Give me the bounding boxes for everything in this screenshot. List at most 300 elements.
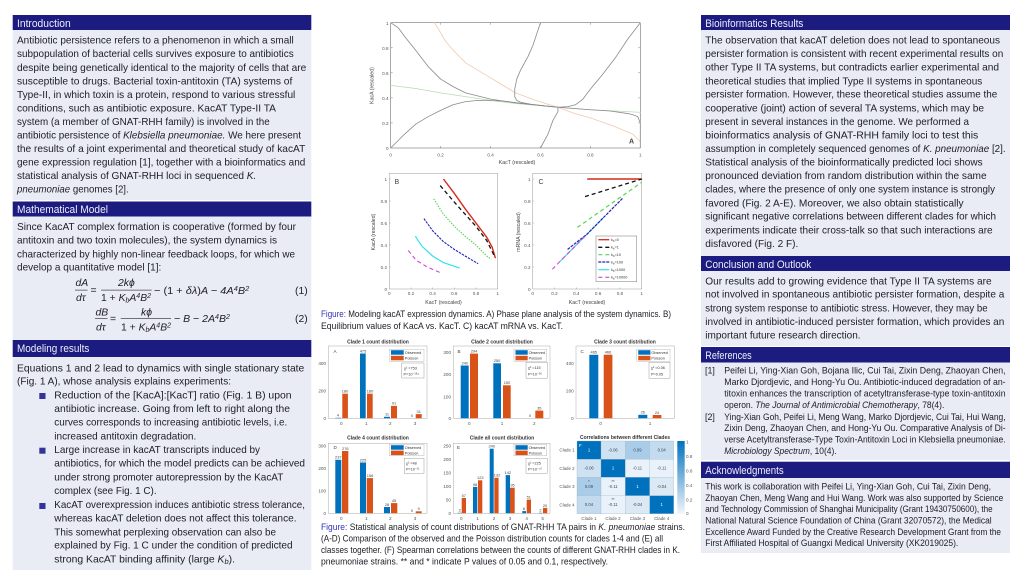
chart: Fig 1C mRNA vs KacT: 0.2 — [551, 291, 558, 296]
panel: mathematical model — [13, 202, 311, 340]
chart: Clade 3 count distribution: C — [580, 349, 584, 354]
chart: Clade 4 count distribution: 3 — [414, 516, 417, 521]
legend: k_b values: =10000 — [615, 276, 627, 280]
bullet item 2: Large increase in kacAT transcripts induced by — [54, 445, 261, 456]
chart: Clade 1 count distribution: A — [334, 349, 338, 354]
text block: bioinformatics — [705, 35, 1006, 250]
chart: Clade all count distribution: 5 — [541, 516, 544, 521]
equation 2: B — [219, 314, 226, 325]
text block: bioinformatics: disfavored (Fig. 2 F). — [705, 239, 798, 250]
legend: observed / poisson: Poisson — [405, 357, 418, 361]
legend: k_b values — [596, 236, 637, 282]
equation 1: dτ — [76, 293, 87, 304]
reference 2: [2] — [705, 412, 715, 422]
equation 2: 4 — [156, 323, 160, 330]
text block: acknowledgments: First Affiliated Hospital of Guangxi Medical University (XK2019025). — [705, 538, 958, 548]
legend: observed / poisson: Poisson — [651, 357, 665, 361]
chart: Clade all count distribution: 200 — [443, 457, 451, 462]
bullet item 1: increased antitoxin degradation. — [54, 431, 196, 442]
equation 2: b — [145, 327, 149, 334]
chart: correlation heatmap: -0.04 — [657, 484, 667, 489]
chart: Clade all count distribution: 1 — [476, 516, 479, 521]
chart: Fig 1A phase plane: 0.2 — [437, 152, 444, 158]
chart: Clade 4 count distribution: 200 — [318, 466, 326, 471]
equation 2: kϕ — [141, 308, 152, 319]
chart: Clade all count distribution: 2 — [539, 508, 542, 513]
chart: Clade 2 count distribution: 35 — [537, 405, 541, 410]
legend: k_b values: b — [613, 254, 615, 258]
bullet item 1: antibiotic increase. Going from left to right along the — [54, 404, 290, 415]
legend: observed / poisson — [514, 349, 547, 361]
chart: Clade all count distribution: 8 — [523, 506, 525, 511]
bullet item 1: Reduction of the [KacA]:[KacT] ratio (Fig. 1 B) upon — [54, 390, 292, 401]
chart: Fig 1C mRNA vs KacT: 0.4 — [524, 243, 531, 248]
text block: introduction: system (a member of GNAT-RHH family) is involved in the — [17, 117, 270, 128]
chart: correlation heatmap: Clade 3 — [559, 484, 575, 489]
chart: correlation heatmap: 1 — [636, 484, 639, 489]
reference 2: Microbiology Spectrum, 10(4). — [724, 446, 837, 456]
chart: correlation heatmap: Clade 2 — [605, 516, 621, 521]
legend: observed / poisson: Poisson — [405, 451, 418, 455]
legend: k_b values: =1000 — [615, 268, 625, 272]
chart: Clade all count distribution: Clade all count distribution — [470, 436, 534, 442]
heading: conclusion and outlook: Conclusion and Outlook — [705, 259, 812, 271]
chart: Clade all count distribution: 98 — [473, 482, 477, 487]
text block: modeling intro: Equations 1 and 2 lead to dynamics with single stationary state — [17, 363, 305, 374]
chart: Clade all count distribution: 4 — [525, 516, 528, 521]
chart: Fig 1A phase plane: KacT (rescaled) — [499, 160, 536, 166]
legend: k_b values: b — [613, 261, 615, 265]
legend: k_b values: k — [611, 268, 613, 272]
chart: Fig 1B KacA vs KacT: 0.6 — [451, 291, 458, 296]
chart: Clade 1 count distribution: 180 — [367, 388, 374, 394]
text block: conclusion: Our results add to growing evidence that Type II TA systems are — [705, 277, 992, 288]
chart: Clade 4 count distribution: 45 — [392, 498, 396, 503]
stat box: χ² =48 — [406, 462, 417, 466]
chart: Fig 1A phase plane: 0.4 — [382, 96, 389, 101]
chart: Clade 4 count distribution: D — [334, 445, 338, 450]
stat box: P=0.05 — [651, 372, 663, 376]
text block: introduction — [16, 36, 307, 196]
equation 1: B — [238, 286, 245, 297]
colorbar: 0.8 — [686, 454, 693, 459]
chart: correlation heatmap: ** — [611, 479, 615, 484]
legend: observed / poisson — [389, 349, 424, 361]
chart: Clade all count distribution: 3 — [509, 516, 512, 521]
chart: Clade 1 count distribution: 91 — [392, 400, 396, 406]
stat box: χ² =0.06 — [651, 366, 665, 370]
chart: Clade all count distribution: 0 — [448, 511, 451, 516]
chart: Fig 1B KacA vs KacT: KacA (rescaled) — [371, 213, 377, 250]
chart: Fig 1C mRNA vs KacT: 0.6 — [595, 291, 602, 296]
chart: Fig 1B KacA vs KacT: 1 — [496, 291, 499, 296]
chart: Clade 1 count distribution: Clade 1 count distribution — [347, 340, 409, 346]
legend: k_b values: b — [613, 247, 615, 251]
stat box — [526, 362, 547, 378]
chart: Clade all count distribution: 2 — [459, 508, 461, 513]
chart: Clade 2 count distribution: 1 — [501, 421, 504, 426]
text block: bioinformatics: present in several instances in the genome. We performed a — [705, 117, 969, 128]
chart: Clade 4 count distribution: 28 — [385, 502, 389, 507]
colorbar: 0 — [686, 511, 689, 516]
chart: correlation heatmap: -0.04 — [633, 502, 643, 507]
legend: observed / poisson — [389, 444, 424, 456]
chart: Clade all count distribution: 50 — [446, 498, 451, 502]
chart: correlation heatmap: -0.06 — [608, 448, 618, 452]
chart: Clade all count distribution: 250 — [443, 444, 451, 448]
chart: Clade 1 count distribution: 4 — [337, 412, 340, 418]
chart: correlation heatmap: 0.09 — [633, 448, 642, 452]
chart: Clade 4 count distribution: 0 — [411, 508, 414, 513]
legend: k_b values: =100 — [615, 260, 623, 264]
caption: figure 2: pneumoniae strains. ** and * indicate P values of 0.05 and 0.1, respectively. — [321, 556, 608, 566]
colorbar: 0.6 — [686, 468, 693, 474]
legend: k_b values: k — [611, 253, 613, 257]
equation 2: 2 — [166, 323, 171, 330]
chart: Clade 3 count distribution: 200 — [566, 388, 574, 394]
reference 1: [1] — [705, 366, 715, 376]
chart: Clade 2 count distribution: 0 — [468, 421, 471, 426]
chart: Fig 1C mRNA vs KacT: 0 — [531, 291, 534, 296]
equation 2: (2) — [295, 314, 308, 325]
caption: figure 1: Equilibrium values of KacA vs. KacT. C) kacAT mRNA vs. KacT. — [321, 321, 563, 331]
panel: modeling results — [13, 340, 311, 570]
panel: references — [701, 347, 1010, 460]
equation 2: 2 — [225, 314, 230, 321]
chart: Fig 1A phase plane: 0 — [389, 152, 392, 158]
bullet item 3 — [39, 500, 305, 566]
chart: Clade 3 count distribution: 24 — [655, 410, 660, 415]
chart: Clade all count distribution: 123 — [477, 475, 484, 480]
chart: Clade 4 count distribution: 1 — [365, 516, 368, 521]
chart: correlation heatmap: 1 — [661, 502, 664, 507]
legend: observed / poisson: Observed — [529, 446, 545, 450]
chart: Clade all count distribution: 57 — [462, 493, 466, 498]
chart: Clade 3 count distribution: 0 — [599, 421, 602, 426]
equation 2: − B − 2A — [174, 314, 214, 325]
chart: Clade 4 count distribution: 0 — [323, 511, 326, 516]
chart: Fig 1B KacA vs KacT: B — [394, 179, 400, 186]
bullet item 3: strong KacAT binding affinity (large K — [54, 554, 224, 565]
chart: Clade 2 count distribution: 300 — [443, 350, 451, 355]
text block: acknowledgments: National Natural Science Foundation of China (Grant 32070572), the Medical — [705, 516, 992, 526]
equation 1 — [75, 278, 308, 304]
bullet item 2: under strong promoter autorepression by the KacAT — [54, 472, 284, 483]
text block: bioinformatics: experiments indicate their cross-talk so that such interactions are — [705, 225, 993, 236]
stat box: χ² =225 — [528, 462, 541, 466]
colorbar: 0.2 — [686, 498, 693, 502]
chart: Clade 1 count distribution — [318, 340, 427, 426]
chart: Clade 2 count distribution: 2 — [533, 421, 536, 426]
chart: correlation heatmap — [559, 435, 693, 521]
chart: Clade 2 count distribution: 240 — [461, 360, 469, 365]
stat box: P=10⁻¹¹ — [406, 468, 420, 472]
chart: Fig 1A phase plane: 0.8 — [587, 152, 594, 158]
legend: k_b values: b — [613, 277, 615, 281]
equation 1: b — [125, 298, 129, 304]
reference 1: Marko Djordjevic, and Hong-Yu Ou. Antibiotic-induced degradation of an- — [724, 377, 1006, 387]
text block: bioinformatics: cooperative (joint) action of several TA systems, which may be — [705, 103, 984, 114]
colorbar: 1 — [686, 440, 689, 444]
equation 1: 4 — [234, 286, 238, 293]
caption: figure 1: Figure: Modeling kacAT expression dynamics. A) Phase plane analysis of the system dynamics. B) — [321, 309, 671, 319]
chart: correlation heatmap: 0.09 — [585, 484, 594, 489]
chart: Clade 3 count distribution: 465 — [591, 350, 597, 354]
chart: correlation heatmap: 1 — [612, 466, 615, 470]
legend: observed / poisson: Poisson — [529, 357, 542, 361]
heading: acknowledgments: Acknowledgments — [705, 465, 784, 477]
heading: references: References — [705, 350, 752, 362]
text block: conclusion: involved in antibiotic-induced persister formation, which provides an — [705, 317, 1005, 328]
text block: introduction: Antibiotic persistence refers to a phenomenon in which a small — [17, 36, 294, 47]
chart: Clade all count distribution: 150 — [443, 470, 451, 476]
chart: Clade 1 count distribution: 180 — [342, 388, 349, 394]
stat box — [649, 362, 670, 378]
chart: Clade 3 count distribution: 400 — [566, 361, 574, 366]
legend: k_b values: b — [613, 269, 615, 273]
chart: Fig 1B KacA vs KacT: 0 — [388, 291, 391, 296]
stat box: P=10⁻¹⁶⁴ — [404, 372, 419, 376]
equation 1: 2kϕ — [117, 278, 135, 289]
chart: Clade all count distribution: 95 — [510, 483, 515, 488]
equation 1: 2 — [146, 293, 151, 300]
text block: bioinformatics: pronounced deviation from random distribution within the same — [705, 171, 987, 182]
chart: correlation heatmap: ** — [611, 497, 615, 502]
equation 2: A — [148, 323, 156, 334]
stat box — [404, 458, 424, 473]
legend: k_b values: =10 — [615, 253, 621, 257]
chart: Fig 1B KacA vs KacT: 1 — [384, 177, 387, 182]
text block: bioinformatics: Statistical analysis of the bioinformatically predicted loci shows — [705, 158, 983, 169]
chart: correlation heatmap: * — [588, 479, 590, 484]
bullet item 3: This somewhat perplexing observation can also be — [54, 527, 276, 538]
stat box: P=10⁻⁴⁷ — [528, 468, 543, 472]
chart: Clade 4 count distribution — [318, 436, 427, 521]
chart: Fig 1B KacA vs KacT: 0.6 — [381, 221, 387, 226]
chart: Clade 4 count distribution: 300 — [318, 443, 326, 448]
equation 1: A — [128, 293, 136, 304]
chart: Fig 1C mRNA vs KacT: 0.6 — [524, 221, 531, 226]
chart: Clade 2 count distribution — [443, 340, 550, 426]
chart: Clade 4 count distribution: 156 — [367, 473, 373, 478]
chart: Clade all count distribution: 240 — [488, 444, 496, 448]
text block: model description — [17, 222, 297, 274]
legend: observed / poisson: Observed — [405, 351, 421, 355]
bullet item 3: b — [224, 557, 229, 566]
chart: correlation heatmap: Clade 4 — [559, 502, 575, 508]
text block: modeling intro: (Fig. 1 A), whose analysis explains experiments: — [17, 377, 231, 388]
reference 1: titoxin enhances the transcription of acetyltransferase-type toxin-antitoxin — [724, 388, 1006, 398]
chart: Fig 1B KacA vs KacT: 0.4 — [429, 291, 436, 296]
bullet item 3: explained by Fig. 1 C under the condition of predicted — [54, 541, 293, 552]
chart: Fig 1A phase plane: 0 — [386, 146, 389, 151]
chart: correlation heatmap: Clade 1 — [559, 448, 575, 452]
text block: introduction: gene expression regulation [1], together with a bioinformatics and — [17, 158, 306, 169]
equation 2: = — [110, 314, 116, 325]
text block: bioinformatics: bioinformatics analysis of GNAT-RHH family loci to test this — [705, 131, 978, 142]
caption: figure 2: (A-D) Comparison of the observed and the Poisson distribution counts for clades 1-4 and (E) all — [321, 534, 663, 544]
chart: Clade 2 count distribution: 200 — [443, 372, 451, 377]
legend: k_b values: =0 — [615, 238, 619, 242]
text block: bioinformatics: significant negative correlations between different clades for which — [705, 212, 996, 223]
chart: Clade 1 count distribution: 31 — [417, 409, 421, 414]
chart: correlation heatmap: -0.11 — [608, 502, 618, 507]
text block: introduction: antibiotic persistence of Klebsiella pneumoniae. We here present — [17, 130, 301, 142]
caption: figure 2: Figure: Statistical analysis of count distributions of GNAT-RHH TA pairs in K. pneumoniae strains. — [321, 522, 685, 532]
chart: Fig 1C mRNA vs KacT: 1 — [640, 291, 643, 296]
text block: introduction: pneumoniae genomes [2]. — [16, 185, 129, 196]
chart: Fig 1B KacA vs KacT: 0.4 — [381, 243, 387, 248]
bullet item 3: KacAT overexpression induces antibiotic stress tolerance, — [54, 500, 305, 511]
chart: Clade 3 count distribution: 1 — [649, 421, 652, 426]
chart: Clade all count distribution: 51 — [527, 494, 531, 500]
chart: Clade 2 count distribution: 0 — [529, 413, 532, 418]
legend: observed / poisson — [637, 349, 670, 361]
legend: k_b values: k — [611, 238, 613, 242]
equation 1: 4 — [136, 293, 140, 300]
equation 1: dA — [76, 278, 88, 289]
chart: Clade all count distribution — [443, 436, 550, 521]
chart: correlation heatmap: 0.04 — [658, 448, 666, 452]
chart: correlation heatmap: -0.11 — [657, 466, 667, 470]
legend: observed / poisson: Observed — [405, 446, 421, 450]
reference 1 — [705, 366, 1006, 410]
panel: introduction — [13, 15, 311, 200]
colorbar: 0.4 — [686, 483, 693, 488]
chart: Fig 1B KacA vs KacT: 0 — [384, 287, 387, 292]
chart: Clade 2 count distribution: 250 — [494, 358, 501, 363]
text block: conclusion — [705, 277, 1005, 342]
text block: model description: antitoxin and two toxin molecules), the system dynamics is — [17, 236, 277, 247]
chart: Clade 3 count distribution: 466 — [605, 350, 611, 354]
text block: acknowledgments: and Technology Commission of Shanghai Municipality (Grant 19430750600), the — [705, 504, 993, 514]
chart: Clade 4 count distribution: 237 — [335, 455, 342, 460]
chart: Clade all count distribution: 132 — [494, 473, 500, 478]
chart: Clade 3 count distribution — [566, 340, 674, 426]
bullet item 2: complex (see Fig. 1 C). — [54, 486, 157, 497]
chart: Clade 2 count distribution: B — [458, 349, 461, 354]
chart: Fig 1A phase plane: 0.4 — [487, 152, 494, 158]
legend: k_b values: k — [611, 276, 613, 280]
chart: Clade 1 count distribution: 200 — [318, 388, 326, 394]
chart: Clade all count distribution: 0 — [460, 516, 463, 521]
chart: Clade 1 count distribution: 475 — [360, 348, 366, 354]
chart: Fig 1B KacA vs KacT: 0.8 — [473, 291, 480, 296]
chart: Clade 2 count distribution: 150 — [504, 380, 511, 385]
chart: Fig 1A phase plane: 0.6 — [537, 152, 544, 158]
caption: figure 2 — [321, 522, 685, 566]
chart: correlation heatmap: 0.04 — [585, 502, 594, 507]
text block: bioinformatics: persister formation. However, these theoretical studies assume the — [705, 90, 998, 101]
chart: Clade 1 count distribution: 3 — [414, 421, 417, 426]
chart: Clade 4 count distribution: 2 — [389, 516, 392, 521]
equation 2: dB — [96, 308, 108, 319]
chart: Fig 1A phase plane: 1 — [386, 21, 389, 26]
chart: Clade all count distribution: 2 — [493, 516, 496, 521]
chart: Clade 2 count distribution: Clade 2 count distribution — [471, 340, 533, 346]
text block: conclusion: strong system response to antibiotic stress. However, they may be — [705, 304, 988, 315]
chart: Clade 1 count distribution: 0 — [340, 421, 343, 426]
text block: conclusion: important future research direction. — [705, 331, 861, 342]
equation 1: 1 + K — [101, 293, 126, 304]
reference 2 — [705, 412, 1006, 456]
text block: bioinformatics: theoretical studies that implied Type II systems in spontaneous — [705, 76, 982, 87]
chart: Fig 1C mRNA vs KacT: 0.8 — [524, 199, 531, 204]
chart: Clade 1 count distribution: 400 — [318, 361, 326, 366]
chart: correlation heatmap: -0.11 — [608, 484, 618, 489]
chart: Fig 1B KacA vs KacT: 0.2 — [381, 265, 387, 270]
colorbar — [677, 440, 693, 516]
chart: Fig 1A phase plane: 0.8 — [382, 46, 389, 51]
equation 2: 4 — [215, 314, 219, 321]
caption: figure 1 — [321, 309, 671, 331]
chart: correlation heatmap: Clade 2 — [559, 466, 575, 471]
text block: introduction: despite being genetically identical to the majority of cells that are — [17, 63, 307, 74]
text block: bioinformatics: assumption in completely sequenced genomes of K. pneumoniae [2]. — [705, 144, 1006, 155]
stat box: P=10⁻²⁶ — [528, 372, 542, 376]
equation 1: B — [140, 293, 147, 304]
chart: Fig 1A phase plane: 0.6 — [382, 71, 389, 76]
chart: Clade 1 count distribution: 11 — [385, 412, 389, 416]
chart: Clade 4 count distribution: 9 — [418, 506, 420, 511]
bullet item 3: whereas kacAT deletion does not affect this tolerance. — [53, 514, 297, 525]
reference 1: Peifei Li, Ying-Xian Goh, Bojana Ilic, Cui Tai, Zixin Deng, Zhaoyan Chen, — [724, 366, 1006, 376]
chart: correlation heatmap: 1 — [588, 448, 591, 452]
bullet item 3: ). — [229, 554, 235, 565]
text block: bioinformatics: other Type II TA systems, but contradicts earlier experimental and — [705, 63, 999, 74]
chart: Fig 1A phase plane: 1 — [639, 152, 642, 158]
panel: conclusion and outlook — [701, 256, 1010, 346]
chart: Clade 2 count distribution: 294 — [471, 348, 478, 353]
reference 2: Zixin Deng, Zhaoyan Chen, and Hong-Yu Ou. Comparative Analysis of Di- — [724, 423, 1006, 433]
chart: correlation heatmap: Clade 4 — [654, 516, 670, 521]
chart: Fig 1C mRNA vs KacT: 1 — [528, 177, 531, 182]
text block: introduction: the results of a joint experimental and theoretical study of kacAT — [17, 144, 306, 155]
chart: Clade 4 count distribution: 100 — [318, 488, 326, 494]
chart: Clade 1 count distribution: 0 — [323, 416, 326, 421]
chart: Clade 4 count distribution: Clade 4 count distribution — [347, 436, 409, 442]
legend: k_b values: k — [611, 246, 613, 250]
text block: bioinformatics: clades, where the presence of only one system instance is strongly — [705, 185, 996, 196]
chart: Clade 2 count distribution: 0 — [448, 416, 451, 421]
legend: observed / poisson — [514, 444, 547, 456]
text block: bioinformatics: persister formation is consistent with recent experimental results on — [705, 49, 1004, 60]
panel: bioinformatics results — [701, 15, 1010, 256]
chart: Clade all count distribution: E — [457, 445, 460, 450]
panel: acknowledgments — [701, 462, 1010, 553]
stat box: χ² =115 — [528, 366, 541, 370]
chart: Fig 1C mRNA vs KacT: 0.8 — [617, 291, 624, 296]
text block: bioinformatics: favored (Fig. 2 A-E). Moreover, we also obtain statistically — [705, 198, 964, 209]
chart: Clade 1 count distribution: 0 — [411, 413, 414, 418]
chart: Fig 1B KacA vs KacT: 0.2 — [408, 291, 415, 296]
chart: Fig 1C mRNA vs KacT: mRNA (rescaled) — [516, 212, 522, 252]
bullet item 2: antibiotics, for which the model predicts can be achieved — [54, 459, 305, 470]
equation 2: dτ — [96, 323, 107, 334]
stat box — [526, 458, 547, 473]
text block: bioinformatics: The observation that kacAT deletion does not lead to spontaneous — [705, 35, 1000, 46]
chart: Clade 3 count distribution: Clade 3 count distribution — [594, 340, 656, 346]
equation 2 — [95, 308, 308, 334]
chart: Clade 3 count distribution: 26 — [641, 410, 645, 415]
text block: introduction: subpopulation of bacterial cells survives exposure to antibiotics — [17, 49, 294, 60]
legend: k_b values: k — [611, 260, 613, 264]
text block: model description: characterized by highly non-linear feedback loops, for which we — [17, 249, 295, 260]
chart: Fig 1A phase plane: KacA (rescaled) — [370, 67, 376, 104]
bullet item 1 — [39, 390, 292, 442]
text block: model description: Since KacAT complex formation is cooperative (formed by four — [17, 222, 297, 233]
text block: conclusion: not involved in spontaneous antibiotic persister formation, despite a — [705, 290, 1005, 301]
